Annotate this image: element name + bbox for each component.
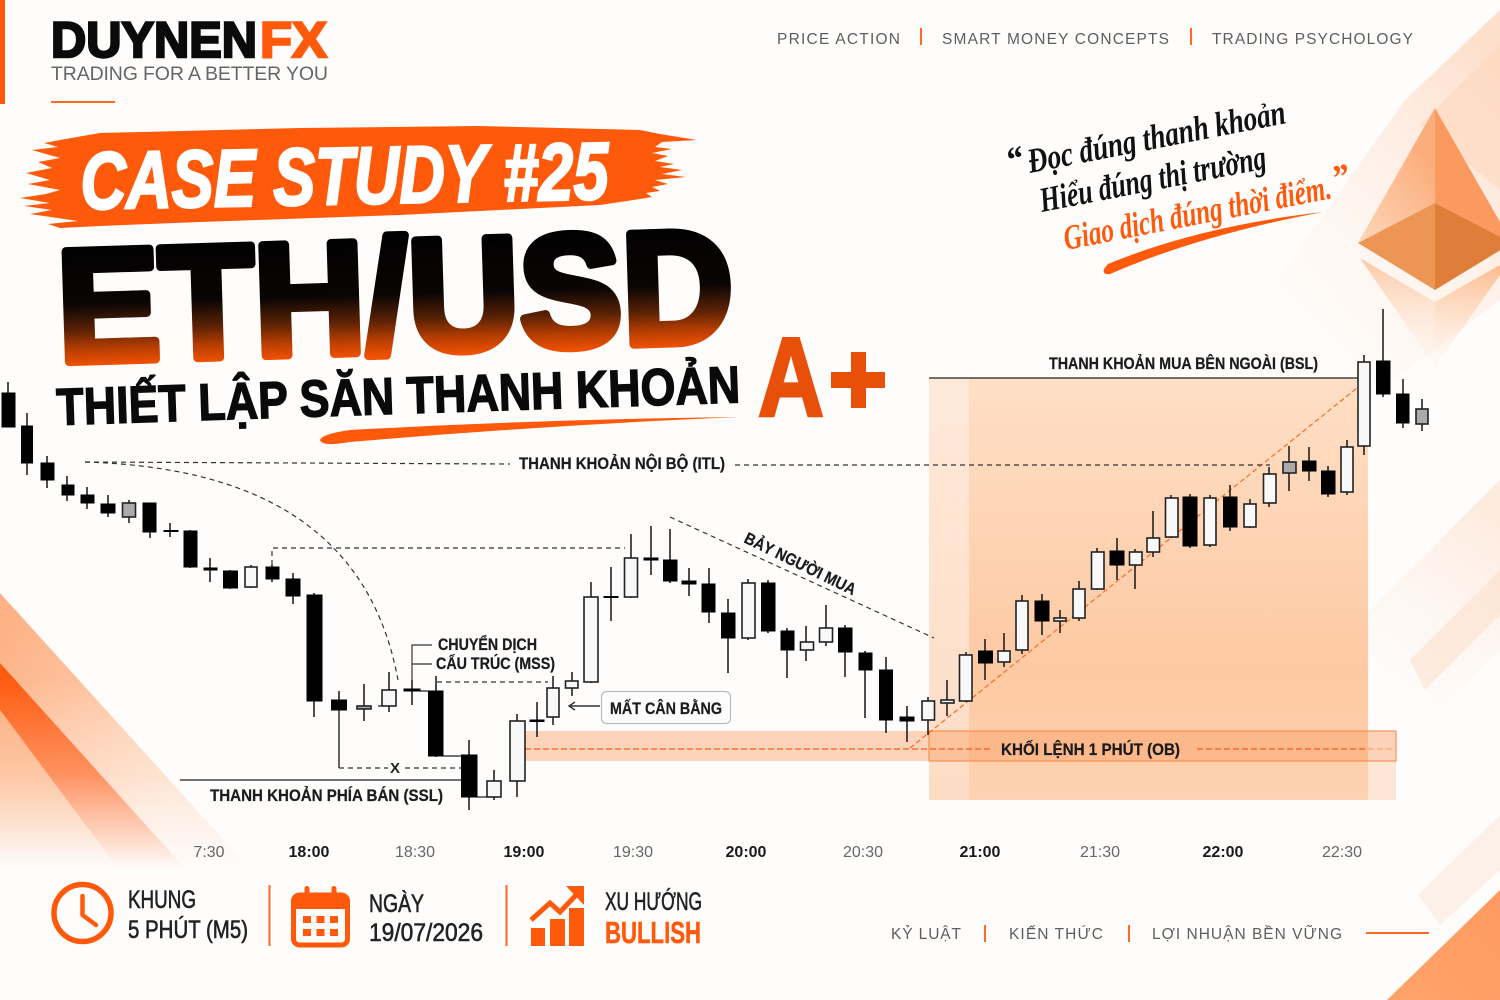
title: ETH/USD: ETH/USD: [55, 196, 736, 396]
candles: structure shift and sweep: [378, 672, 578, 810]
subtitle: setup: THIẾT LẬP SĂN THANH KHOẢN: [55, 355, 741, 437]
candles: rally and trap: [584, 526, 914, 742]
logo: FX: [260, 12, 327, 68]
level: internal liquidity: [85, 454, 1270, 473]
time axis: 22:30: [1322, 844, 1362, 861]
candles: initial decline: [2, 382, 371, 721]
top navigation: SMART MONEY CONCEPTS: [942, 31, 1169, 48]
logo: [51, 12, 328, 103]
MSS label: CHUYỂN DỊCH: [438, 635, 537, 654]
level: sell-side liquidity: THANH KHOẢN PHÍA BÁN (SSL): [210, 786, 443, 805]
buyer trap label: BẢY NGƯỜI MUA: [741, 529, 859, 599]
time axis: 20:30: [843, 844, 883, 861]
quote: “: [1002, 138, 1027, 180]
divider: [506, 885, 508, 946]
time axis: 7:30: [193, 844, 225, 861]
icon: calendar: [293, 886, 348, 945]
panel: timeframe: KHUNG: [128, 886, 196, 914]
panel: trend: XU HƯỚNG: [605, 887, 702, 916]
order block band: [525, 731, 1396, 761]
left edge accent bar: [0, 0, 5, 104]
order block band: KHỐI LỆNH 1 PHÚT (OB): [1001, 739, 1180, 759]
time axis: 19:00: [504, 844, 545, 861]
icon: ethereum logo: [1358, 108, 1500, 367]
top navigation: PRICE ACTION: [777, 31, 900, 48]
icon: clock: [54, 884, 111, 942]
callout: imbalance: [569, 692, 730, 724]
panel: trend: [531, 886, 702, 950]
trend line: [910, 388, 1357, 748]
icon: bullish chart: [531, 886, 584, 946]
top navigation: TRADING PSYCHOLOGY: [1212, 31, 1413, 48]
divider: [268, 885, 270, 946]
footer values: [891, 925, 1429, 943]
footer values: KỶ LUẬT: [891, 926, 962, 943]
logo: TRADING FOR A BETTER YOU: [51, 63, 328, 85]
logo: DUYNEN: [51, 12, 257, 68]
panel: date: 19/07/2026: [369, 919, 483, 947]
top navigation: [777, 28, 1413, 48]
level: buy-side liquidity: THANH KHOẢN MUA BÊN NGOÀI (BSL): [1049, 354, 1318, 373]
level: internal liquidity: THANH KHOẢN NỘI BỘ (ITL): [519, 454, 725, 473]
quote: ”: [1328, 156, 1353, 198]
panel: timeframe: [54, 884, 248, 944]
quote: Giao dịch đúng thời điểm.: [1060, 168, 1335, 258]
level: swing high dashed: [272, 548, 625, 574]
panel: date: NGÀY: [369, 889, 424, 918]
time axis: 22:00: [1203, 844, 1244, 861]
liquidity sweep marker X: X: [390, 760, 400, 777]
time axis: 21:00: [960, 844, 1001, 861]
time axis: 21:30: [1080, 844, 1120, 861]
grade A+: [758, 315, 885, 440]
time axis: [193, 844, 1362, 861]
panel: trend: BULLISH: [605, 915, 701, 950]
quote: [1002, 93, 1353, 274]
time axis: 18:00: [289, 844, 330, 861]
liquidity sweep marker X: [339, 710, 461, 777]
MSS label: [412, 635, 555, 690]
panel: timeframe: 5 PHÚT (M5): [128, 915, 248, 944]
time axis: 20:00: [726, 844, 767, 861]
candles: liquidity grab top: [1358, 309, 1428, 455]
panel: date: [293, 886, 483, 947]
buyer trap label: [670, 517, 934, 638]
quote: Đọc đúng thanh khoản: [1023, 93, 1289, 181]
quote: Hiểu đúng thị trường: [1035, 138, 1269, 220]
time axis: 18:30: [395, 844, 435, 861]
footer values: KIẾN THỨC: [1009, 926, 1103, 943]
MSS label: CẤU TRÚC (MSS): [436, 654, 555, 673]
grade A+: A: [758, 315, 824, 440]
case study brush banner: CASE STUDY #25: [80, 127, 610, 227]
time axis: 19:30: [613, 844, 653, 861]
footer values: LỢI NHUẬN BỀN VỮNG: [1152, 926, 1342, 943]
curved arrow path: [85, 462, 398, 680]
candles: bullish expansion: [922, 440, 1353, 735]
panel: buy-side zone: [929, 378, 1396, 800]
callout: imbalance: MẤT CÂN BẰNG: [610, 699, 722, 718]
